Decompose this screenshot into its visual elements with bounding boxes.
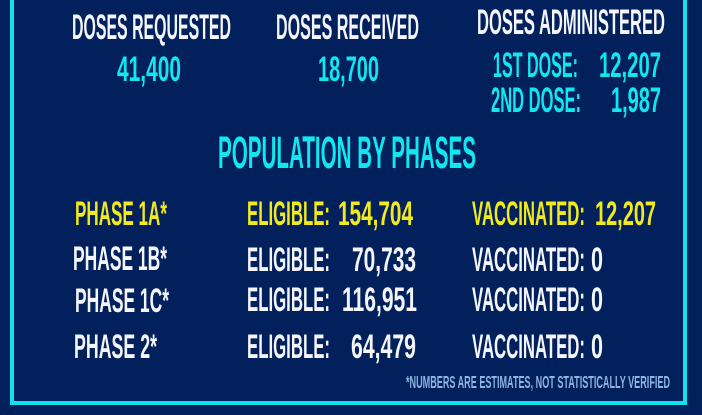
- row: phase 1A: 154,704: [338, 195, 413, 233]
- infographic canvas: DOSES RECEIVED: [276, 8, 419, 47]
- row: phase 1A: 12,207: [595, 195, 656, 233]
- row: phase 1C: 116,951: [342, 281, 417, 319]
- row: phase 1B: 0: [591, 241, 603, 279]
- row: phase 1C: 0: [591, 281, 603, 319]
- row: phase 1C: ELIGIBLE:: [247, 281, 330, 319]
- infographic canvas: DOSES REQUESTED: [72, 8, 231, 47]
- row: phase 2: ELIGIBLE:: [247, 328, 330, 366]
- stat: doses requested: 41,400: [117, 50, 181, 89]
- row: phase 2: VACCINATED:: [472, 328, 585, 366]
- row: phase 2: PHASE 2*: [74, 328, 157, 366]
- stat: doses received: [276, 8, 419, 89]
- stat: doses received: 18,700: [318, 50, 379, 89]
- row: phase 1A: ELIGIBLE:: [247, 195, 330, 233]
- row: phase 1B: PHASE 1B*: [73, 240, 167, 278]
- row: phase 1A: VACCINATED:: [472, 195, 585, 233]
- row: phase 1C: [75, 281, 603, 320]
- row: phase 1B: VACCINATED:: [472, 241, 585, 279]
- stat: doses requested: [72, 8, 231, 89]
- stat: doses administered: 1,987: [611, 81, 661, 120]
- row: phase 1C: PHASE 1C*: [75, 282, 169, 320]
- row: phase 1B: [73, 240, 603, 279]
- row: phase 2: [74, 328, 603, 366]
- stat: doses administered: 2ND DOSE:: [491, 81, 581, 120]
- row: phase 2: 0: [591, 328, 603, 366]
- row: phase 1B: 70,733: [352, 241, 416, 279]
- row: phase 1B: ELIGIBLE:: [247, 241, 330, 279]
- row: phase 1C: VACCINATED:: [472, 281, 585, 319]
- stat: doses administered: 1ST DOSE:: [493, 46, 578, 85]
- row: phase 2: 64,479: [351, 328, 416, 366]
- row: phase 1A: PHASE 1A*: [75, 195, 167, 233]
- stat: doses administered: [477, 3, 665, 120]
- row: phase 1A: [75, 195, 656, 233]
